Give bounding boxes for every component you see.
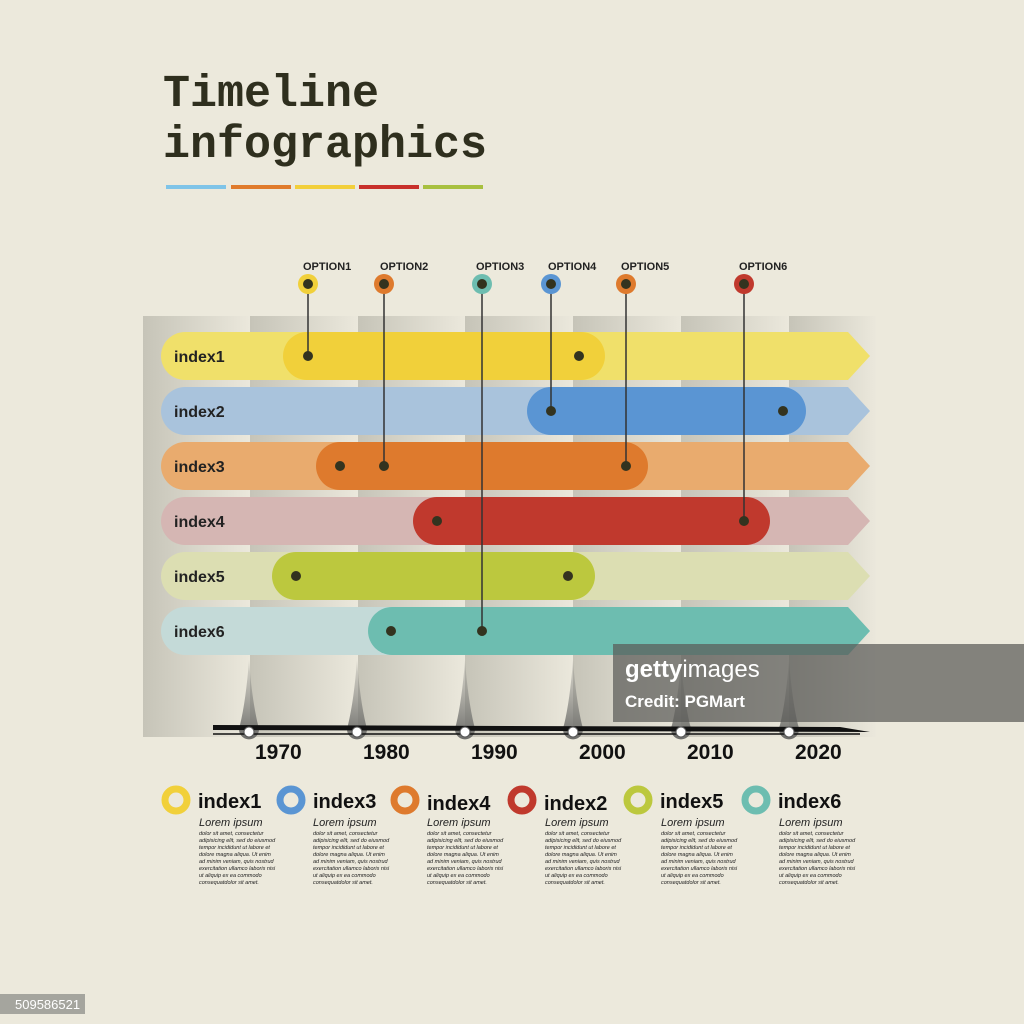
- legend descriptions: [199, 817, 856, 886]
- legend descriptions: dolor sit amet, consectetur: [779, 831, 845, 837]
- watermark: Credit: PGMart: [625, 692, 745, 711]
- year labels: [255, 741, 842, 764]
- year labels: 1970: [255, 741, 302, 764]
- option markers and connector lines: [308, 283, 744, 631]
- legend descriptions: Lorem ipsum: [545, 817, 609, 829]
- row: index2: index2: [174, 404, 225, 421]
- image id badge: [0, 994, 85, 1014]
- year labels: 2000: [579, 741, 626, 764]
- legend descriptions: tempor incididunt ut labore et: [313, 845, 384, 851]
- image id badge: 509586521: [15, 997, 80, 1012]
- legend: index1: [198, 791, 261, 813]
- row: index3: [161, 442, 870, 490]
- row: index3: index3: [174, 459, 225, 476]
- legend descriptions: dolore magna aliqua. Ut enim: [545, 852, 617, 858]
- legend descriptions: consequatdolor sit amet.: [199, 880, 259, 886]
- legend: [165, 789, 841, 815]
- legend descriptions: ad minim veniam, quis nostrud: [545, 859, 621, 865]
- option labels: OPTION3: [476, 261, 524, 273]
- legend descriptions: exercitation ullamco laboris nisi: [199, 866, 276, 872]
- year labels: 1990: [471, 741, 518, 764]
- legend descriptions: Lorem ipsum: [779, 817, 843, 829]
- row: index1: index1: [174, 349, 225, 366]
- option labels: [303, 261, 787, 273]
- row: index5: [161, 552, 870, 600]
- row: index6: [161, 607, 870, 655]
- legend descriptions: dolor sit amet, consectetur: [199, 831, 265, 837]
- legend descriptions: adipisicing elit, sed do eiusmod: [779, 838, 856, 844]
- year labels: 2010: [687, 741, 734, 764]
- legend descriptions: ad minim veniam, quis nostrud: [313, 859, 389, 865]
- legend descriptions: adipisicing elit, sed do eiusmod: [199, 838, 276, 844]
- legend descriptions: adipisicing elit, sed do eiusmod: [661, 838, 738, 844]
- option labels: OPTION6: [739, 261, 787, 273]
- option labels: OPTION4: [548, 261, 597, 273]
- legend descriptions: tempor incididunt ut labore et: [199, 845, 270, 851]
- year labels: 1980: [363, 741, 410, 764]
- legend descriptions: consequatdolor sit amet.: [545, 880, 605, 886]
- legend descriptions: Lorem ipsum: [313, 817, 377, 829]
- legend descriptions: dolor sit amet, consectetur: [661, 831, 727, 837]
- legend descriptions: dolor sit amet, consectetur: [545, 831, 611, 837]
- legend descriptions: dolore magna aliqua. Ut enim: [427, 852, 499, 858]
- legend descriptions: consequatdolor sit amet.: [427, 880, 487, 886]
- legend descriptions: ad minim veniam, quis nostrud: [199, 859, 275, 865]
- legend: index2: [544, 793, 607, 815]
- legend descriptions: dolor sit amet, consectetur: [313, 831, 379, 837]
- legend descriptions: dolore magna aliqua. Ut enim: [779, 852, 851, 858]
- legend descriptions: ut aliquip ex ea commodo: [661, 873, 724, 879]
- legend descriptions: Lorem ipsum: [427, 817, 491, 829]
- row: index1: [161, 332, 870, 380]
- legend descriptions: Lorem ipsum: [661, 817, 725, 829]
- legend descriptions: ad minim veniam, quis nostrud: [779, 859, 855, 865]
- color bars under title: [166, 185, 483, 189]
- legend descriptions: adipisicing elit, sed do eiusmod: [427, 838, 504, 844]
- legend descriptions: dolore magna aliqua. Ut enim: [199, 852, 271, 858]
- legend descriptions: exercitation ullamco laboris nisi: [313, 866, 390, 872]
- row: index5: index5: [174, 569, 225, 586]
- row: index4: [161, 497, 870, 545]
- row: index6: index6: [174, 624, 225, 641]
- legend descriptions: dolore magna aliqua. Ut enim: [313, 852, 385, 858]
- legend descriptions: ut aliquip ex ea commodo: [779, 873, 842, 879]
- legend descriptions: tempor incididunt ut labore et: [545, 845, 616, 851]
- legend descriptions: tempor incididunt ut labore et: [779, 845, 850, 851]
- legend descriptions: ut aliquip ex ea commodo: [545, 873, 608, 879]
- title: [163, 69, 487, 171]
- legend descriptions: exercitation ullamco laboris nisi: [779, 866, 856, 872]
- option labels: OPTION2: [380, 261, 428, 273]
- legend descriptions: adipisicing elit, sed do eiusmod: [313, 838, 390, 844]
- year labels: 2020: [795, 741, 842, 764]
- row: index2: [161, 387, 870, 435]
- legend descriptions: dolor sit amet, consectetur: [427, 831, 493, 837]
- legend: index5: [660, 791, 723, 813]
- legend descriptions: ad minim veniam, quis nostrud: [427, 859, 503, 865]
- timeline axis: [213, 660, 870, 739]
- bar dots: [291, 351, 788, 636]
- legend descriptions: tempor incididunt ut labore et: [661, 845, 732, 851]
- legend descriptions: exercitation ullamco laboris nisi: [427, 866, 504, 872]
- legend descriptions: consequatdolor sit amet.: [313, 880, 373, 886]
- legend descriptions: adipisicing elit, sed do eiusmod: [545, 838, 622, 844]
- legend descriptions: exercitation ullamco laboris nisi: [545, 866, 622, 872]
- legend descriptions: dolore magna aliqua. Ut enim: [661, 852, 733, 858]
- option circles: [298, 274, 754, 294]
- background columns panel: [143, 316, 876, 737]
- legend descriptions: consequatdolor sit amet.: [779, 880, 839, 886]
- legend: index3: [313, 791, 376, 813]
- legend descriptions: ut aliquip ex ea commodo: [199, 873, 262, 879]
- option labels: OPTION5: [621, 261, 669, 273]
- option labels: OPTION1: [303, 261, 351, 273]
- legend: index6: [778, 791, 841, 813]
- legend descriptions: Lorem ipsum: [199, 817, 263, 829]
- legend descriptions: consequatdolor sit amet.: [661, 880, 721, 886]
- legend descriptions: tempor incididunt ut labore et: [427, 845, 498, 851]
- legend descriptions: ad minim veniam, quis nostrud: [661, 859, 737, 865]
- title: infographics: [163, 120, 487, 171]
- legend descriptions: ut aliquip ex ea commodo: [313, 873, 376, 879]
- title: Timeline: [163, 69, 379, 120]
- row: index4: index4: [174, 514, 225, 531]
- watermark: gettyimages: [625, 656, 760, 683]
- legend descriptions: ut aliquip ex ea commodo: [427, 873, 490, 879]
- watermark: [613, 644, 1024, 722]
- legend: index4: [427, 793, 491, 815]
- legend descriptions: exercitation ullamco laboris nisi: [661, 866, 738, 872]
